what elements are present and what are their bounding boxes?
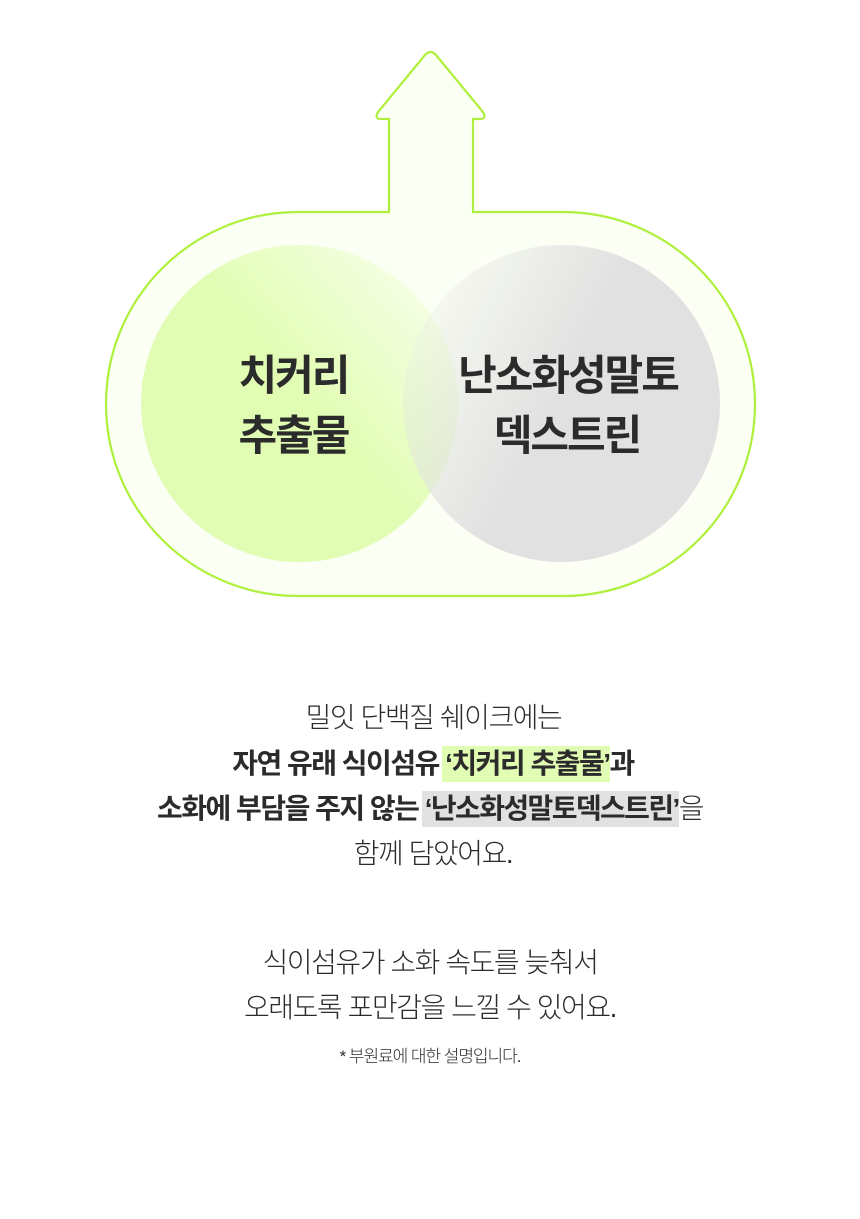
text block: main description: [157, 702, 703, 869]
label: dextrin line two: 덱스트린: [494, 412, 640, 459]
label: extract line two: 추출물: [239, 412, 349, 459]
line 2 with green highlight: ‘치커리 추출물’: [445, 748, 610, 779]
diagram: two overlapping ingredient circles inside arrow-topped capsule: [104, 50, 756, 598]
label: indigestible maltodextrin: 난소화성말토: [458, 352, 678, 399]
left circle: chicory extract: [141, 245, 458, 562]
line 2 with green highlight: 자연 유래 식이섬유 과: [232, 748, 634, 779]
line 3 with grey highlight: 소화에 부담을 주지 않는 을: [157, 793, 703, 824]
label: chicory extract: 치커리: [239, 352, 348, 399]
footnote: * 부원료에 대한 설명입니다.: [340, 1047, 520, 1066]
line 1: 식이섬유가 소화 속도를 늦춰서: [262, 947, 598, 978]
arrow capsule outline: [106, 52, 755, 596]
right circle: indigestible maltodextrin: [403, 245, 720, 562]
line 2: 오래도록 포만감을 느낄 수 있어요.: [244, 992, 616, 1023]
line 4: 함께 담았어요.: [354, 838, 512, 869]
line 3 with grey highlight: ‘난소화성말토덱스트린’: [425, 793, 679, 824]
text block: satiety description: [244, 947, 616, 1023]
line 1: 밀잇 단백질 쉐이크에는: [306, 702, 561, 733]
